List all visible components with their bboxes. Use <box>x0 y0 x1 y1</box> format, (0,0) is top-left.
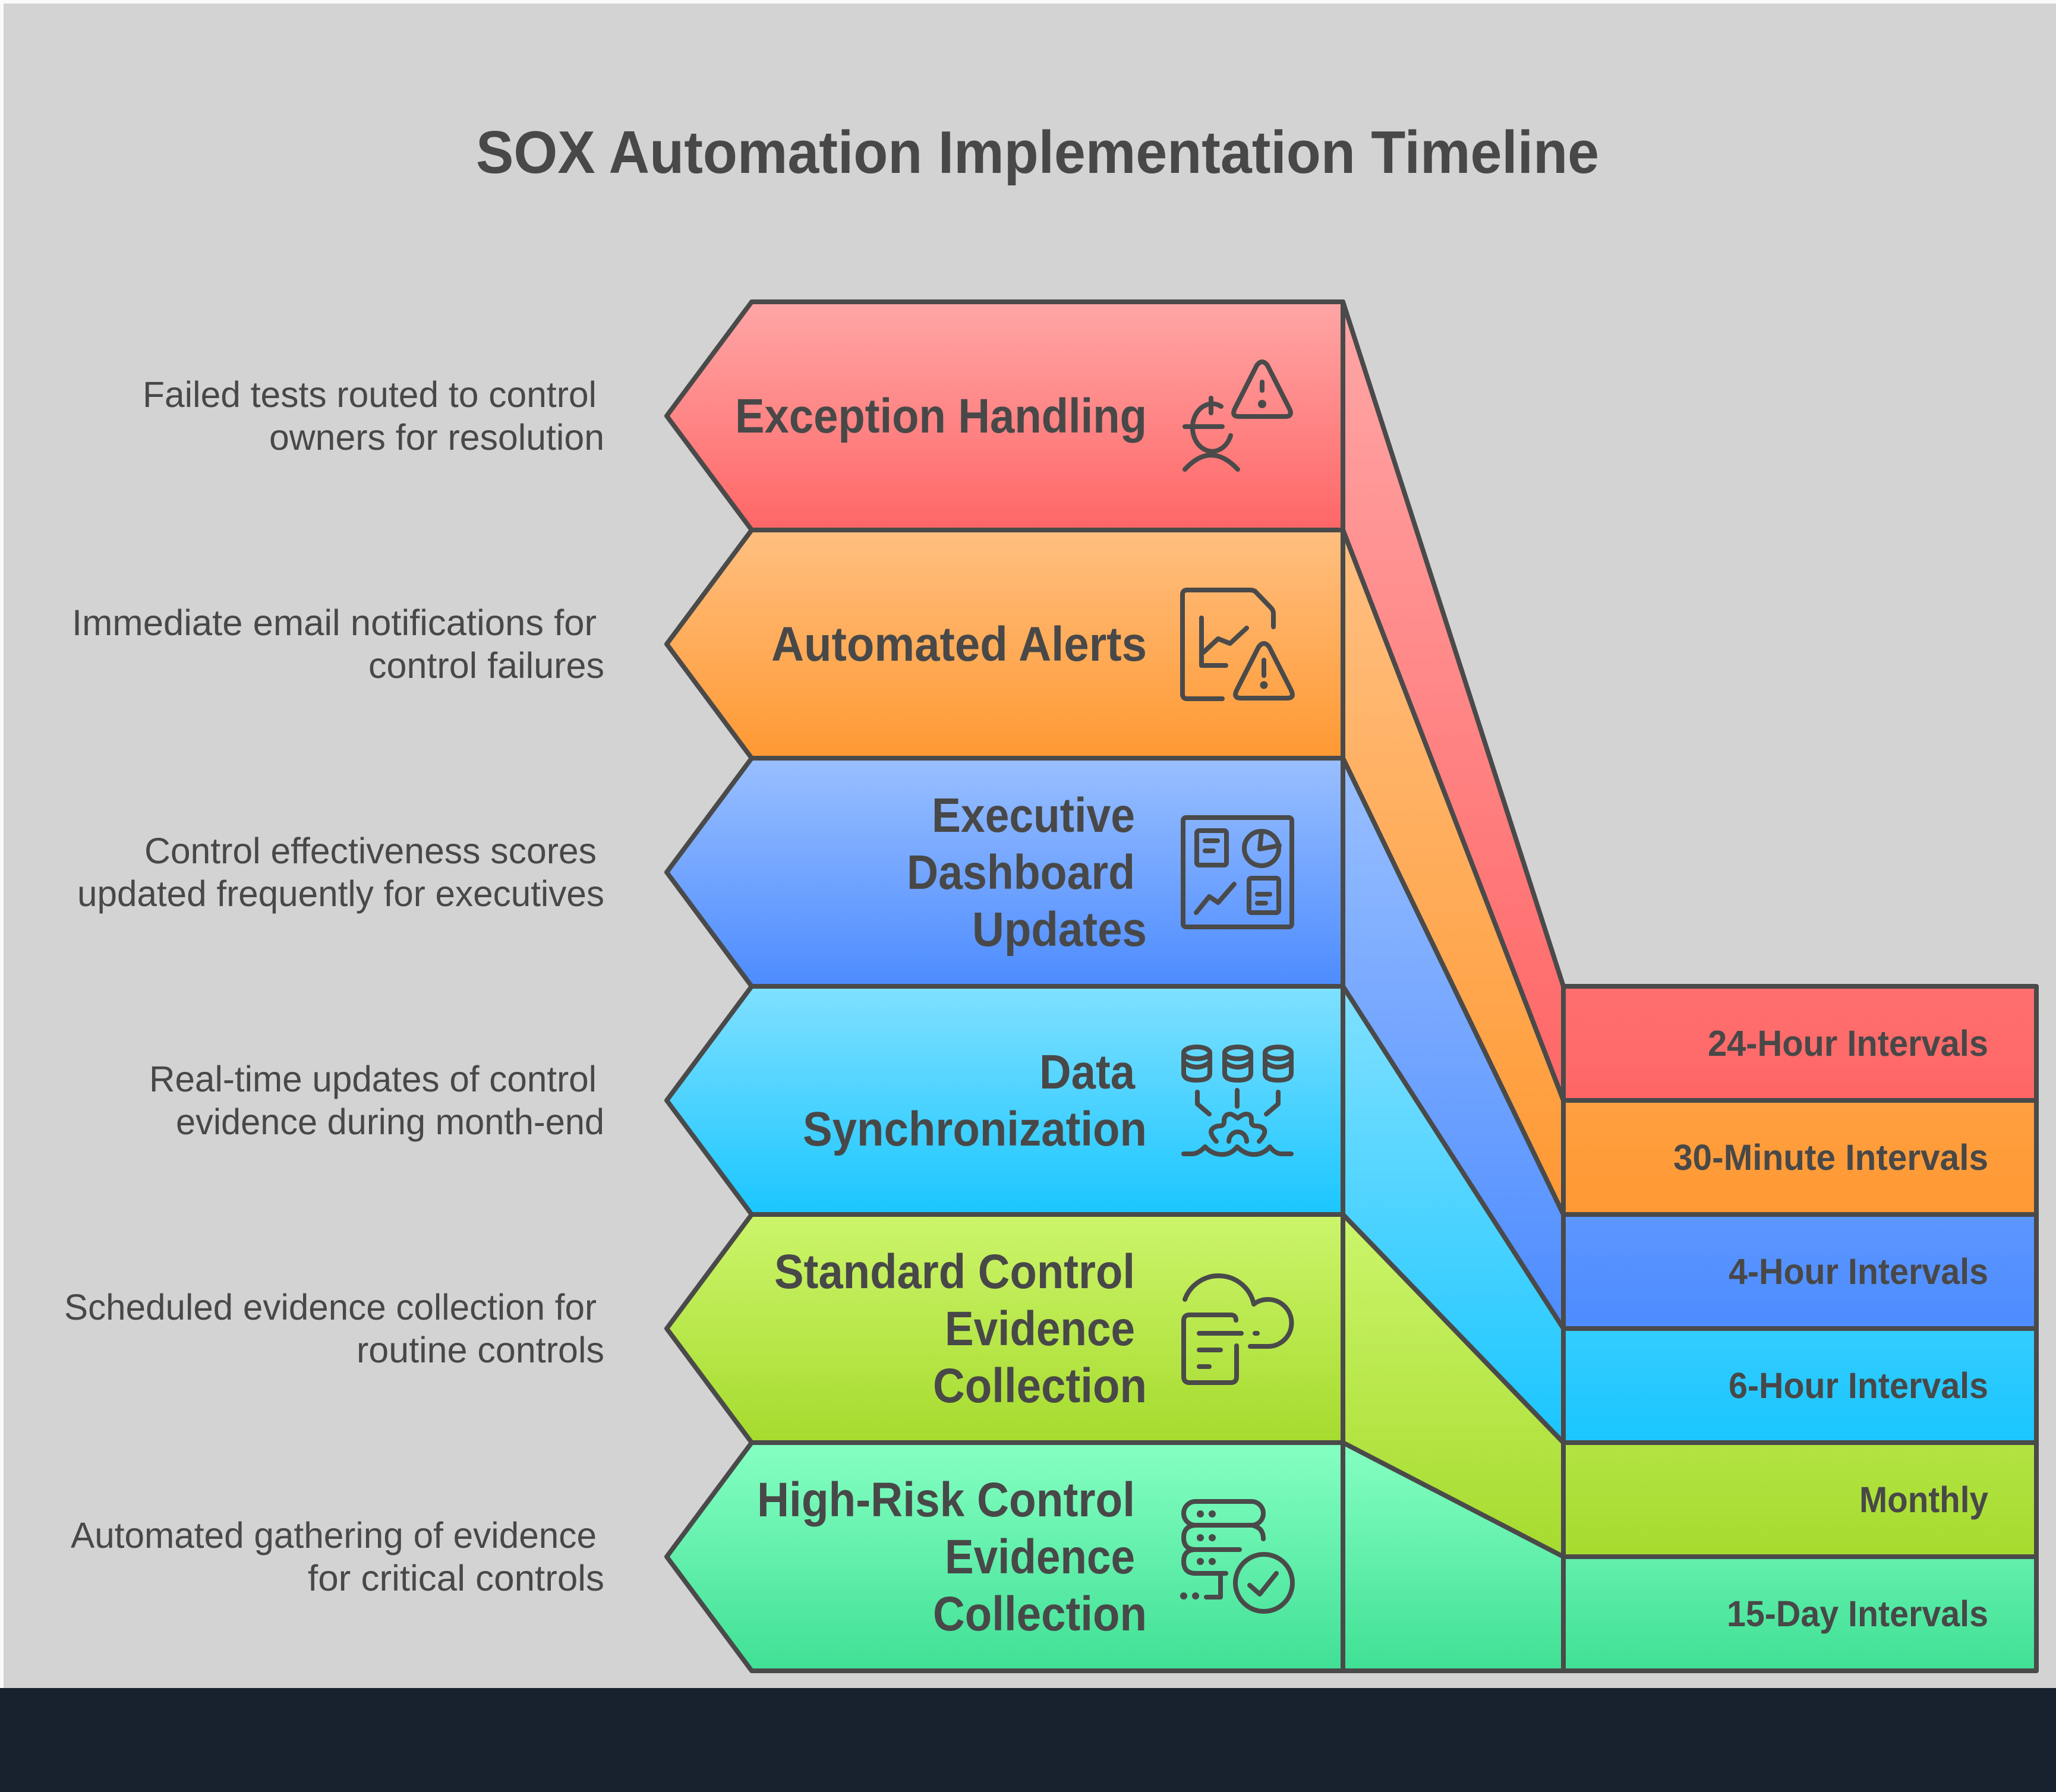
arrow panel: Exception Handling <box>667 302 1343 530</box>
row: Executive Dashboard Updates <box>77 758 2036 1329</box>
arrow panel: Standard Control Evidence Collection <box>667 1214 1343 1443</box>
row: Exception Handling <box>143 302 2036 1100</box>
description: Executive Dashboard Updates: Control effectiveness scores <box>144 831 597 871</box>
description: High-Risk Control Evidence Collection: Automated gathering of evidence <box>71 1515 597 1556</box>
heading: Executive Dashboard Updates: Updates <box>972 903 1147 957</box>
heading: Data Synchronization <box>803 1045 1147 1156</box>
heading: Standard Control Evidence Collection <box>774 1245 1147 1413</box>
heading: High-Risk Control Evidence Collection: Collection <box>933 1587 1147 1641</box>
description: Data Synchronization: evidence during month-end <box>176 1102 604 1142</box>
interval label: 4-Hour Intervals: 4-Hour Intervals <box>1729 1251 1988 1292</box>
heading: Executive Dashboard Updates: Executive <box>932 788 1135 843</box>
arrow panel: Data Synchronization <box>667 986 1343 1214</box>
interval label: 24-Hour Intervals: 24-Hour Intervals <box>1708 1023 1988 1064</box>
description: Executive Dashboard Updates <box>77 831 604 914</box>
connector and interval box: 4-Hour Intervals <box>1343 758 2036 1329</box>
interval label: 30-Minute Intervals: 30-Minute Intervals <box>1673 1137 1988 1178</box>
description: Automated Alerts <box>72 602 604 686</box>
description: Standard Control Evidence Collection: Scheduled evidence collection for <box>64 1287 597 1327</box>
title: SOX Automation Implementation Timeline <box>476 119 1599 186</box>
heading: Data Synchronization: Synchronization <box>803 1102 1147 1156</box>
heading: Standard Control Evidence Collection: Collection <box>933 1359 1147 1413</box>
icon: person with warning triangle <box>1185 362 1291 469</box>
arrow panel: Executive Dashboard Updates <box>667 758 1343 986</box>
row: High-Risk Control Evidence Collection <box>71 1443 2036 1671</box>
heading: Executive Dashboard Updates <box>907 788 1147 957</box>
description: Standard Control Evidence Collection: routine controls <box>357 1330 604 1370</box>
heading: Standard Control Evidence Collection: Standard Control <box>774 1245 1135 1299</box>
heading: Executive Dashboard Updates: Dashboard <box>907 845 1135 900</box>
heading: Exception Handling: Exception Handling <box>735 389 1147 443</box>
arrow panel: Automated Alerts <box>667 530 1343 758</box>
connector and interval box: 6-Hour Intervals <box>1343 986 2036 1443</box>
footer band <box>0 1688 2056 1792</box>
description: High-Risk Control Evidence Collection: for critical controls <box>308 1558 604 1598</box>
heading: High-Risk Control Evidence Collection: Evidence <box>945 1530 1135 1584</box>
connector and interval box: 30-Minute Intervals <box>1343 530 2036 1214</box>
row: Standard Control Evidence Collection <box>64 1214 2036 1557</box>
interval label: 6-Hour Intervals: 6-Hour Intervals <box>1729 1365 1988 1406</box>
description: Standard Control Evidence Collection <box>64 1287 604 1370</box>
description: Executive Dashboard Updates: updated frequently for executives <box>77 873 604 914</box>
heading: Data Synchronization: Data <box>1039 1045 1136 1099</box>
connector and interval box: 24-Hour Intervals <box>1343 302 2036 1100</box>
interval label: 15-Day Intervals: 15-Day Intervals <box>1727 1594 1988 1634</box>
icon: chart document with warning <box>1182 590 1292 699</box>
connector and interval box: Monthly <box>1343 1214 2036 1557</box>
description: Exception Handling: Failed tests routed to control <box>143 374 597 415</box>
row: Automated Alerts <box>72 530 2036 1214</box>
description: Exception Handling <box>143 374 604 458</box>
description: Automated Alerts: Immediate email notifications for <box>72 602 597 643</box>
interval label: Monthly: Monthly <box>1859 1479 1988 1520</box>
connector and interval box: 15-Day Intervals <box>1343 1443 2036 1671</box>
icon: cloud document <box>1184 1276 1292 1383</box>
row: Data Synchronization <box>149 986 2036 1443</box>
description: High-Risk Control Evidence Collection <box>71 1515 604 1598</box>
description: Data Synchronization <box>149 1059 604 1142</box>
icon: server with check <box>1180 1501 1292 1611</box>
description: Automated Alerts: control failures <box>368 645 604 686</box>
icon: databases syncing <box>1184 1047 1291 1154</box>
heading: High-Risk Control Evidence Collection: High-Risk Control <box>757 1473 1135 1527</box>
arrow panel: High-Risk Control Evidence Collection <box>667 1443 1343 1671</box>
icon: dashboard <box>1183 818 1292 927</box>
heading: High-Risk Control Evidence Collection <box>757 1473 1147 1641</box>
heading: Standard Control Evidence Collection: Evidence <box>945 1302 1135 1356</box>
heading: Automated Alerts: Automated Alerts <box>771 617 1147 671</box>
description: Data Synchronization: Real-time updates of control <box>149 1059 597 1099</box>
description: Exception Handling: owners for resolution <box>269 417 604 458</box>
